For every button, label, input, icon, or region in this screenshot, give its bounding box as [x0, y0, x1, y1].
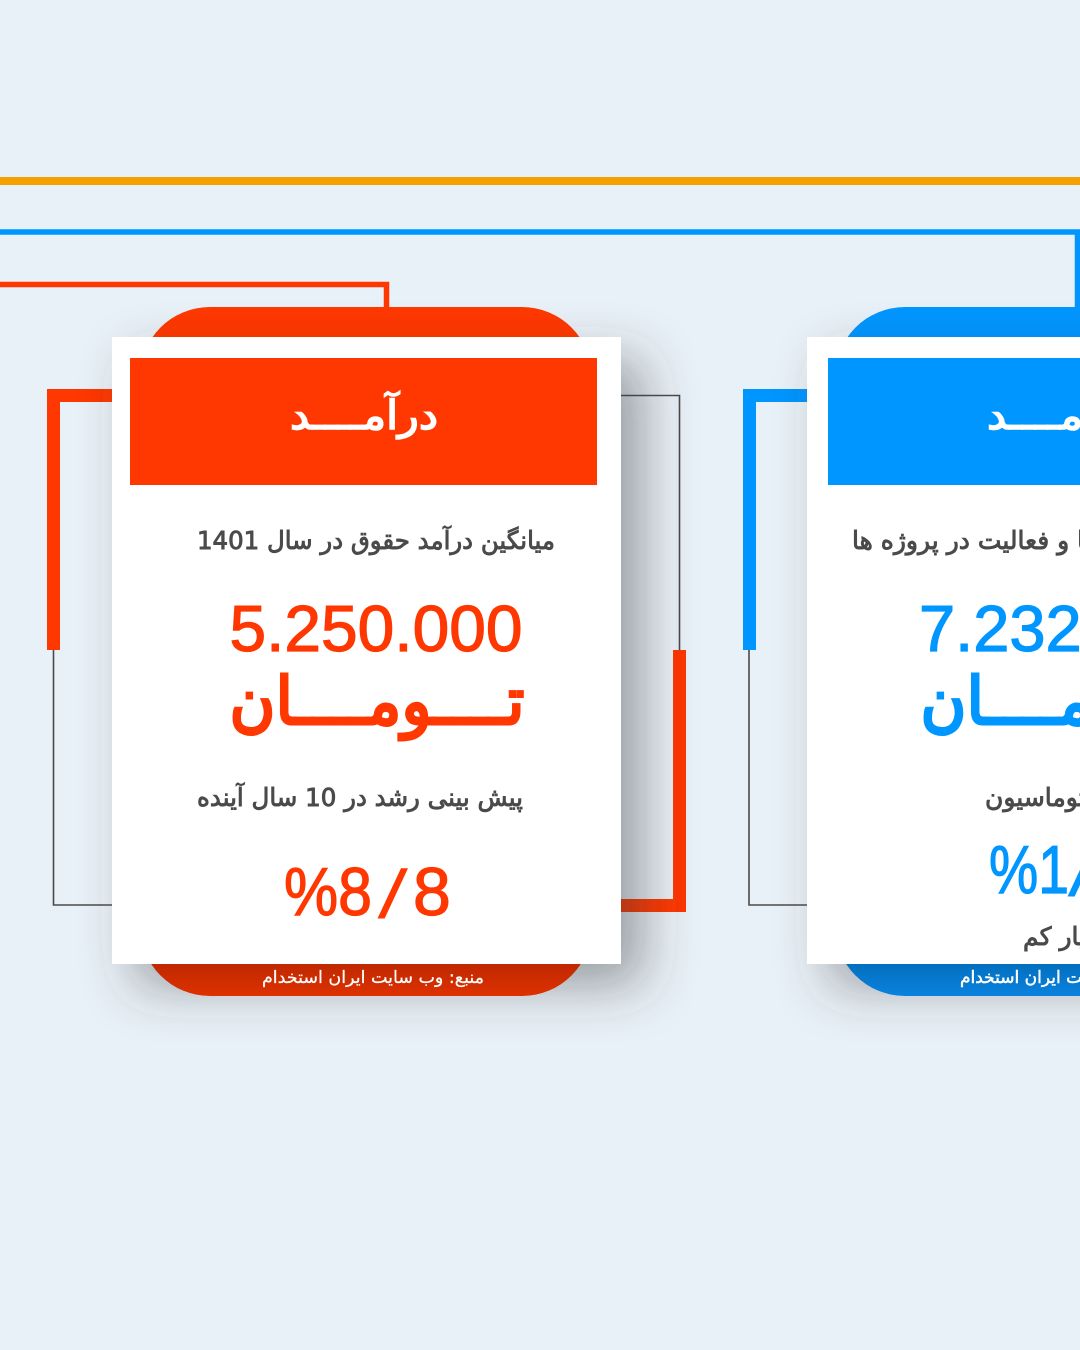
- growth figure: 8: [413, 854, 451, 930]
- blue rounded backing panel: [835, 307, 1080, 996]
- white card: [807, 337, 1080, 964]
- source note: منبع: وب سایت ایران استخدام: [262, 968, 484, 988]
- salary unit: تــــومــــان: [230, 663, 524, 740]
- label: average salary: میانگین درآمد حقوق در سال 1401: [197, 525, 555, 555]
- frame: red card outline: [54, 396, 680, 906]
- card shadow: [112, 337, 621, 964]
- panel: income red card: [54, 307, 680, 996]
- blue connector line: [0, 232, 1078, 307]
- orange connector line: [0, 177, 1080, 185]
- growth figure: [284, 854, 451, 932]
- header bar: [828, 358, 1080, 485]
- label: growth forecast: پیش بینی رشد در 10 سال آینده: [197, 782, 523, 812]
- growth figure: %8: [284, 854, 372, 930]
- salary figure: 5.250.000: [230, 592, 522, 665]
- panel: income blue card: [749, 307, 1080, 996]
- frame: blue card outline: [749, 396, 807, 905]
- red rounded backing panel: [140, 307, 592, 996]
- heading: درآمــــد: [290, 391, 438, 439]
- white card: [112, 337, 621, 964]
- card shadow: [807, 337, 1080, 964]
- growth figure: /: [376, 859, 409, 932]
- header bar: [130, 358, 597, 485]
- red connector line: [0, 284, 386, 307]
